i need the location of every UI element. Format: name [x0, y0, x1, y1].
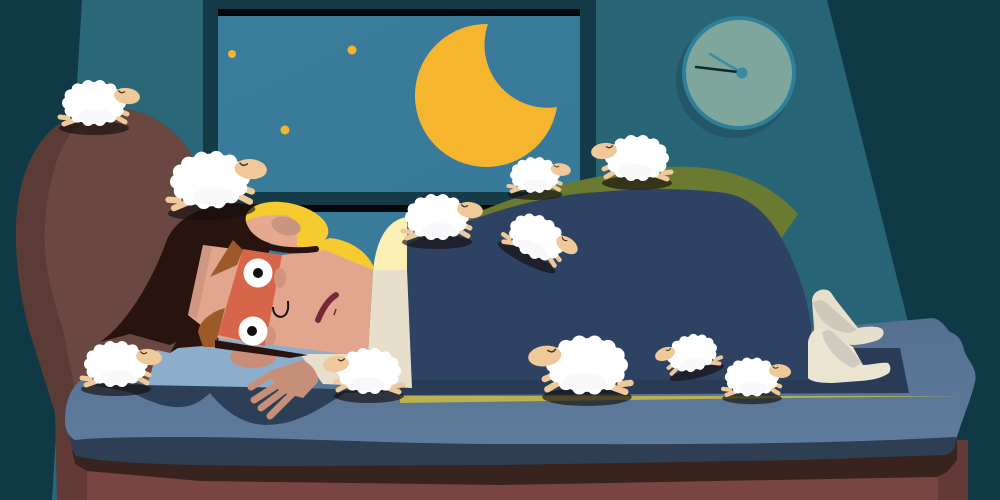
slippers: [808, 289, 890, 383]
yellow sheet line: [400, 396, 965, 403]
pajama collar: [300, 217, 412, 388]
head: [188, 195, 374, 368]
sheep 3 by the pillow: [81, 341, 163, 396]
headboard: [16, 109, 250, 500]
pillow: [147, 335, 368, 391]
sheep 8 leaping downward: [495, 204, 585, 283]
stars: [228, 46, 356, 134]
hand: [251, 360, 318, 416]
sheep 5 at shoulder: [402, 194, 484, 249]
mouth: [318, 295, 336, 320]
sheep 6 on blanket edge: [508, 157, 572, 200]
orange eye band: [218, 249, 282, 346]
moon: [415, 24, 557, 167]
nose: [273, 301, 288, 317]
sheep 11 near slippers: [722, 357, 792, 404]
window: [203, 0, 596, 272]
face: [188, 245, 373, 357]
mattress: [65, 318, 976, 466]
sheep 4 beside hand: [322, 348, 404, 403]
hair: [100, 204, 270, 353]
upper ear: [241, 195, 333, 255]
sheep 9 large on bed: [527, 336, 632, 406]
sheep 10 rising: [651, 328, 725, 387]
blanket: [403, 167, 814, 380]
eyebrows: [210, 240, 243, 277]
bed shadow band: [400, 348, 909, 395]
hair strands: [250, 240, 316, 250]
eyes: [238, 258, 272, 346]
eye bags: [274, 268, 286, 288]
sheep 2 above head: [165, 148, 271, 222]
yellow side hair: [296, 238, 374, 272]
bed base: [57, 440, 968, 500]
chin: [230, 346, 276, 368]
sheep 1 on headboard: [59, 80, 141, 135]
sheep 7 on blanket top: [590, 135, 672, 190]
wall clock: [676, 16, 796, 138]
shadow on bed under head and hand: [88, 384, 405, 425]
